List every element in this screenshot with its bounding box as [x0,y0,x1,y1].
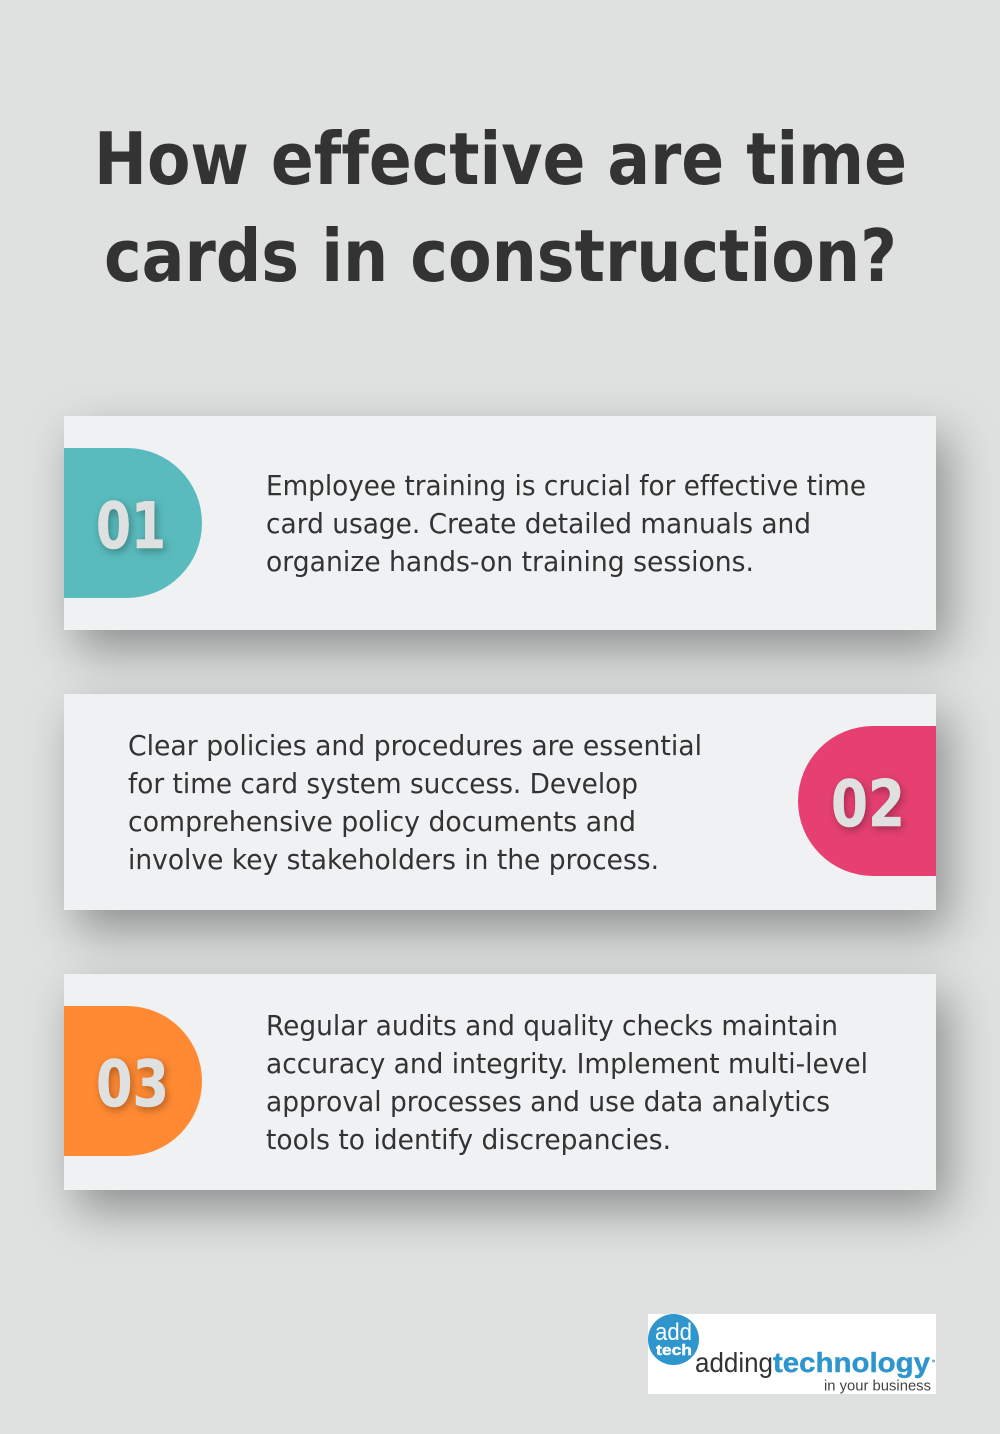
wordmark: adding [695,1347,773,1378]
icon: add tech circle: add [655,1319,692,1346]
text: step 03 description: approval processes and use data analytics [266,1086,830,1118]
title [94,117,907,298]
tagline: in your business [824,1378,931,1394]
text: step 01 description: organize hands-on training sessions. [266,546,754,578]
number: 02: 02 [831,768,905,842]
logo: addingtechnology: technology [773,1347,930,1378]
text: step 02 description [128,730,702,876]
text: step 01 description: Employee training is crucial for effective time [266,470,866,502]
badge: 01 [64,448,202,598]
number: 03: 03 [96,1048,169,1122]
text: step 03 description: tools to identify discrepancies. [266,1124,671,1156]
text: step 03 description: accuracy and integrity. Implement multi-level [266,1048,868,1080]
panel: step 01 [64,416,936,630]
title: How effective are time [94,117,907,201]
title: cards in construction? [104,214,897,298]
badge: 02 [798,726,936,876]
text: step 02 description: involve key stakeholders in the process. [128,844,659,876]
text: step 02 description: for time card system success. Develop [128,768,638,800]
number: 01: 01 [96,490,166,564]
icon: add tech circle [648,1314,699,1365]
icon: add tech circle: tech [656,1342,692,1359]
badge: 03 [64,1006,202,1156]
panel: step 03 [64,974,936,1190]
text: step 01 description [266,470,866,578]
panel: step 02 [64,694,936,910]
text: step 02 description: comprehensive policy documents and [128,806,636,838]
text: step 02 description: Clear policies and procedures are essential [128,730,702,762]
text: step 01 description: card usage. Create detailed manuals and [266,508,811,540]
text: step 03 description [266,1010,868,1156]
text: step 03 description: Regular audits and quality checks maintain [266,1010,838,1042]
